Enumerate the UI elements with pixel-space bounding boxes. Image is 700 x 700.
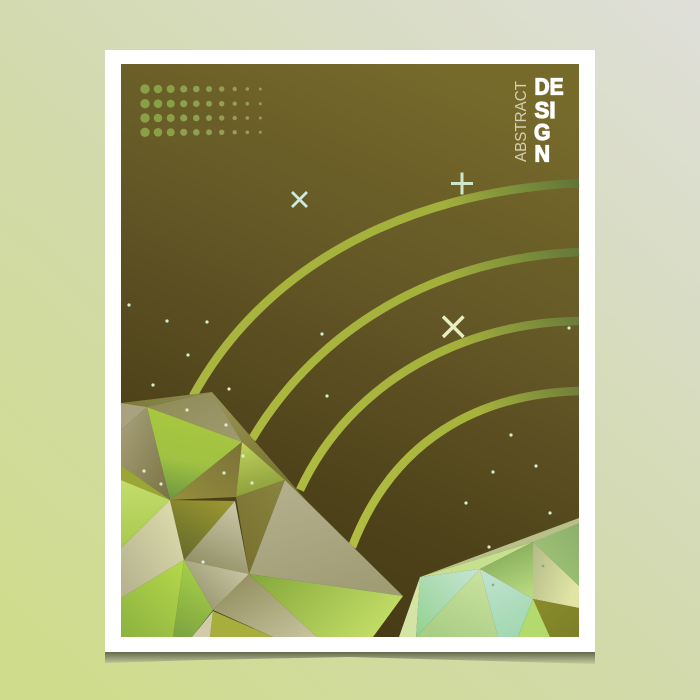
dark olive poster panel — [121, 64, 579, 637]
stacked word DESIGN: G — [534, 119, 550, 145]
plus mark — [451, 172, 473, 194]
concentric arcs — [193, 183, 579, 547]
cross mark large — [443, 316, 464, 337]
card drop shadow — [105, 650, 595, 664]
stacked word DESIGN: SI — [534, 97, 556, 123]
stacked word DESIGN: DE — [534, 74, 564, 100]
stacked word DESIGN — [534, 74, 564, 166]
halftone dot grid — [140, 84, 262, 137]
title: abstract design — [513, 74, 564, 166]
cross mark small — [292, 192, 307, 207]
stacked word DESIGN: N — [534, 140, 550, 166]
left low-poly rock — [121, 392, 403, 637]
white poster card — [105, 50, 595, 652]
scattered star dots — [127, 303, 571, 586]
vertical word ABSTRACT: ABSTRACT — [513, 80, 530, 162]
right low-poly rock — [399, 518, 579, 637]
